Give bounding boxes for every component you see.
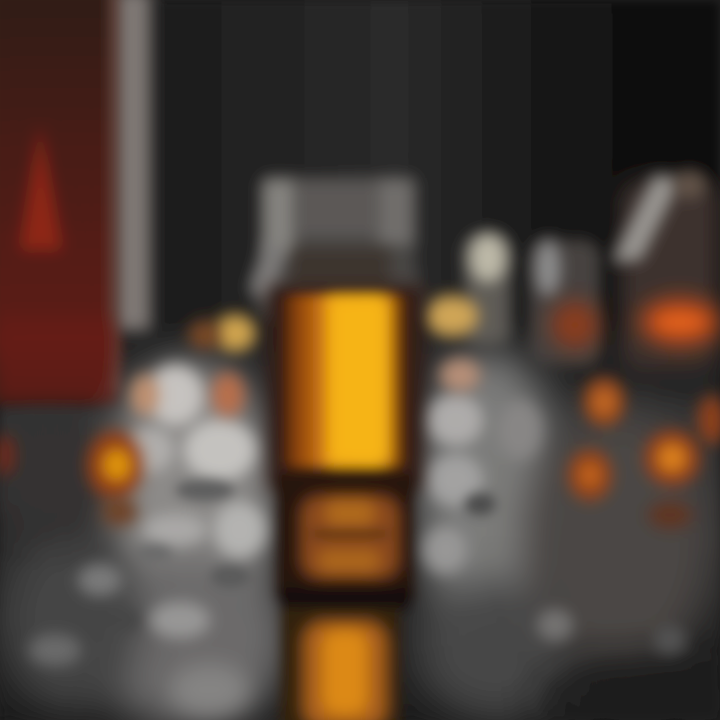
bottle base reflection (275, 475, 415, 610)
red panel with white strip at left (0, 0, 150, 405)
right orange pills (426, 296, 720, 529)
small bottles at right (465, 171, 720, 370)
bottle neck and shoulder (250, 178, 425, 320)
left orange pills (0, 315, 255, 526)
left pile of white pills (0, 360, 290, 720)
central amber bottle (250, 178, 425, 720)
right pile of white pills (415, 350, 720, 720)
bottle amber body (268, 285, 423, 490)
lower reflection on table (280, 608, 400, 720)
